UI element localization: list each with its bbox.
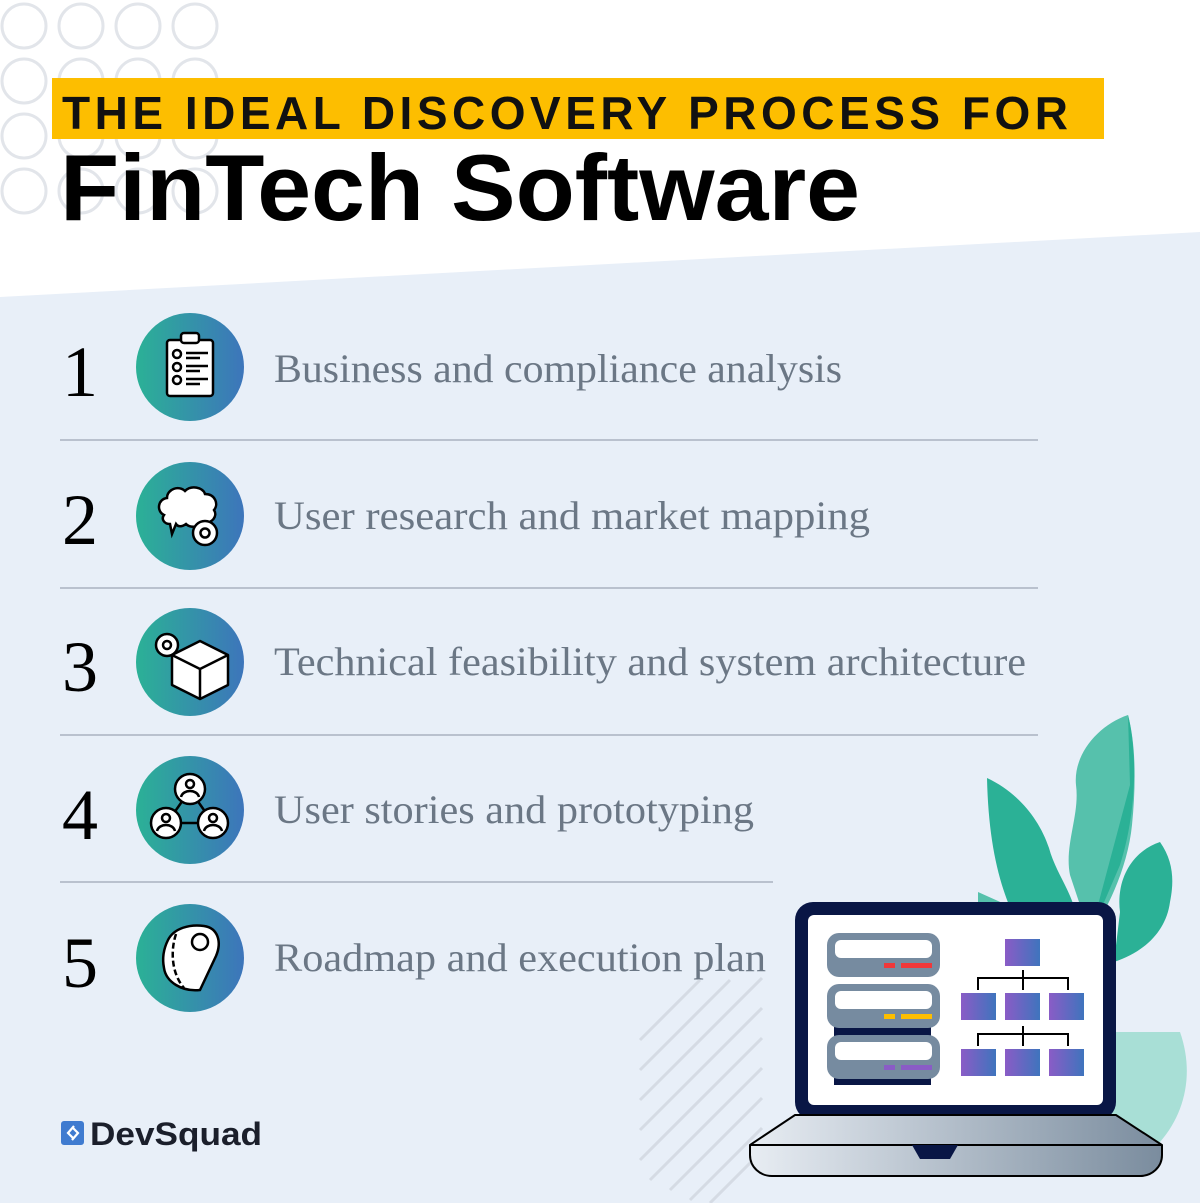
step 1: Business and compliance analysis	[274, 346, 842, 391]
step 4: 4	[62, 775, 98, 855]
logo: DevSquad	[90, 1116, 262, 1152]
title: FinTech Software	[60, 135, 860, 240]
icon: clipboard	[167, 333, 213, 396]
icon: map pin	[163, 926, 219, 990]
step 5: 5	[62, 923, 98, 1003]
icon: gear cube	[156, 634, 228, 699]
step 1	[62, 313, 842, 421]
title banner: THE IDEAL DISCOVERY PROCESS FOR	[62, 87, 1068, 139]
step 2	[62, 462, 870, 570]
step 3: Technical feasibility and system architecture	[274, 639, 1026, 684]
icon: brain gear	[159, 487, 217, 545]
dividers	[60, 440, 1038, 882]
hatch decoration	[640, 978, 762, 1203]
server stack	[827, 933, 940, 1085]
step 2: 2	[62, 480, 98, 560]
step 2: User research and market mapping	[274, 493, 870, 538]
org chart	[961, 939, 1084, 1076]
step 3	[62, 608, 1026, 716]
step 5: Roadmap and execution plan	[274, 935, 766, 980]
laptop illustration	[750, 902, 1162, 1176]
plant	[978, 715, 1187, 1142]
step 3: 3	[62, 627, 98, 707]
icon: people network	[151, 774, 228, 838]
step 4	[62, 756, 754, 864]
step 1: 1	[62, 332, 98, 412]
step 5	[62, 904, 766, 1012]
step 4: User stories and prototyping	[274, 787, 754, 832]
